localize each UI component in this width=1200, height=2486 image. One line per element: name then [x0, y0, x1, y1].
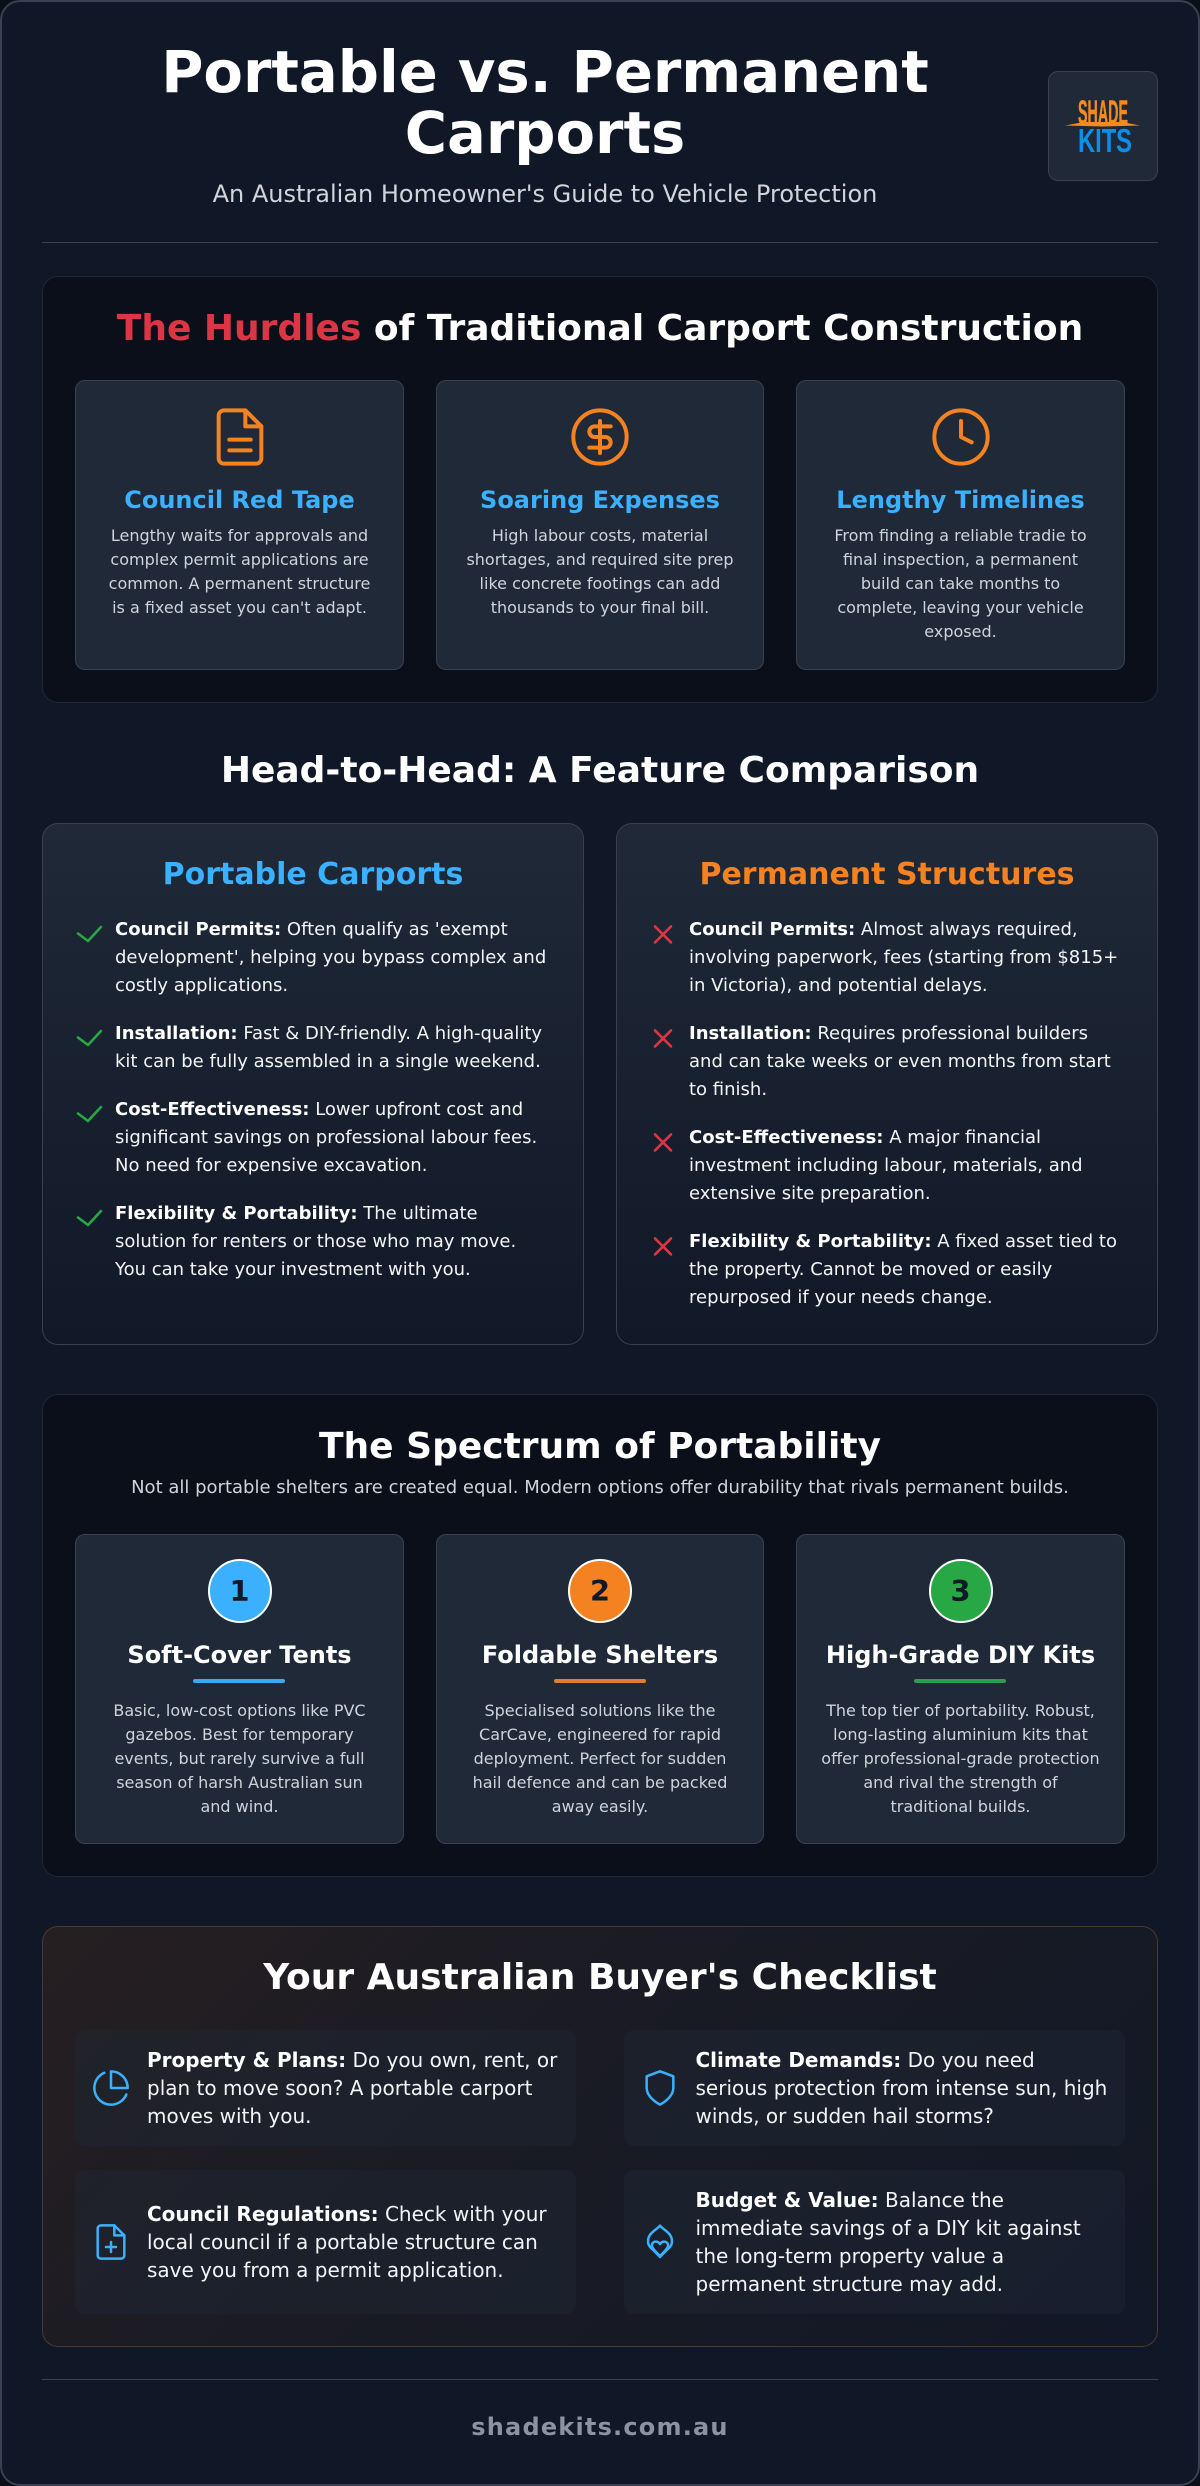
card text: exposed.	[924, 622, 997, 641]
heading: The Spectrum of Portability	[319, 1426, 881, 1466]
item: installation: and can take weeks or even months from start	[689, 1051, 1111, 1072]
card text: and rival the strength of	[863, 1773, 1058, 1792]
card text: CarCave, engineered for rapid	[479, 1725, 721, 1744]
item: flexibility	[76, 1203, 516, 1280]
card text: traditional builds.	[890, 1797, 1030, 1816]
step number 3: 3	[950, 1574, 971, 1608]
item: property and plans: Property & Plans: Do you own, rent, or	[147, 2048, 557, 2072]
icon: dollar	[571, 408, 629, 466]
heading: comparison: Head-to-Head: A Feature Comparison	[221, 750, 979, 791]
card text	[473, 1701, 727, 1816]
item: council regulations	[75, 2170, 576, 2314]
card text	[466, 526, 734, 617]
item: installation	[76, 1023, 542, 1072]
item: flexibility: You can take your investment with you.	[115, 1259, 471, 1280]
step number 1: 1	[229, 1574, 250, 1608]
title	[161, 39, 929, 166]
logo: Shade Kits	[1048, 71, 1158, 181]
card text: season of harsh Australian sun	[116, 1773, 363, 1792]
item: council permits	[654, 919, 1118, 996]
card text	[109, 526, 370, 617]
card heading: Council Red Tape	[124, 486, 355, 514]
item: property and plans: moves with you.	[147, 2104, 312, 2128]
card: lengthy timelines	[796, 380, 1125, 670]
card heading: High-Grade DIY Kits	[826, 1640, 1095, 1668]
step number 2	[568, 1559, 632, 1623]
item: climate demands: serious protection from intense sun, high	[696, 2076, 1107, 2100]
icon: shield	[645, 2070, 675, 2106]
icon: budget heart	[646, 2224, 674, 2258]
panel: buyer's checklist	[42, 1926, 1158, 2346]
card text: build can take months to	[861, 574, 1060, 593]
heading: hurdles: The Hurdles of Traditional Carport Construction	[117, 308, 1083, 348]
item: budget and value	[624, 2170, 1124, 2314]
card text: deployment. Perfect for sudden	[474, 1749, 726, 1768]
card text: final inspection, a permanent	[843, 550, 1078, 569]
item: council permits	[76, 919, 546, 996]
item: council permits: costly applications.	[115, 975, 288, 996]
card text: From finding a reliable tradie to	[834, 526, 1087, 545]
item: climate demands: winds, or sudden hail storms?	[696, 2104, 994, 2128]
item: budget and value: the long-term property value a	[696, 2244, 1004, 2268]
item: cost-effectiveness: investment including labour, materials, and	[689, 1155, 1083, 1176]
card text	[821, 1701, 1100, 1816]
title: Portable vs. Permanent	[161, 39, 929, 106]
card heading: Lengthy Timelines	[836, 486, 1085, 514]
item: cost-effectiveness: significant savings on professional labour fees.	[115, 1127, 537, 1148]
item: installation	[654, 1023, 1111, 1100]
heading: Your Australian Buyer's Checklist	[263, 1957, 937, 1998]
card text: Basic, low-cost options like PVC	[113, 1701, 366, 1720]
item: council regulations: local council if a portable structure can	[147, 2230, 538, 2254]
card text: offer professional-grade protection	[821, 1749, 1100, 1768]
card text	[834, 526, 1087, 641]
item: council regulations: save you from a permit application.	[147, 2258, 504, 2282]
item: cost-effectiveness	[76, 1099, 537, 1176]
card text: long-lasting aluminium kits that	[833, 1725, 1088, 1744]
intro text: Not all portable shelters are created equal. Modern options offer durability that rivals permanent builds.	[131, 1477, 1069, 1498]
card text: is a fixed asset you can't adapt.	[112, 598, 367, 617]
card: high-grade DIY kits	[796, 1534, 1125, 1844]
subtitle: An Australian Homeowner's Guide to Vehicle Protection	[213, 180, 877, 208]
item: flexibility: Flexibility & Portability: A fixed asset tied to	[689, 1231, 1117, 1252]
card: soft-cover tents	[75, 1534, 404, 1844]
item: installation: kit can be fully assembled in a single weekend.	[115, 1051, 541, 1072]
panel: permanent structures	[616, 823, 1158, 1345]
card: council red tape	[75, 380, 404, 670]
step number 2: 2	[590, 1574, 610, 1608]
icon: file plus	[96, 2224, 126, 2260]
card text: Specialised solutions like the	[484, 1701, 716, 1720]
card heading: Soft-Cover Tents	[127, 1640, 352, 1668]
title: Carports	[405, 100, 685, 166]
step number 1	[208, 1559, 272, 1623]
item: council permits: in Victoria), and potential delays.	[689, 975, 988, 996]
item: cost-effectiveness	[654, 1127, 1083, 1204]
panel heading: Portable Carports	[163, 856, 463, 892]
item: property and plans	[75, 2030, 576, 2146]
card heading: Foldable Shelters	[482, 1640, 718, 1668]
panel: hurdles	[42, 276, 1158, 703]
card: soaring expenses	[436, 380, 764, 670]
item: flexibility: solution for renters or those who may move.	[115, 1231, 516, 1252]
panel heading: Permanent Structures	[699, 856, 1075, 892]
item: installation: Installation: Fast & DIY-friendly. A high-quality	[115, 1023, 542, 1044]
item: flexibility: repurposed if your needs change.	[689, 1287, 993, 1308]
card text: gazebos. Best for temporary	[125, 1725, 354, 1744]
step number 3	[928, 1559, 992, 1623]
item: budget and value: permanent structure may add.	[696, 2272, 1003, 2296]
card text	[113, 1701, 366, 1816]
card text: and wind.	[200, 1797, 279, 1816]
card: foldable shelters	[436, 1534, 764, 1844]
card text: The top tier of portability. Robust,	[826, 1701, 1095, 1720]
card text: events, but rarely survive a full	[114, 1749, 365, 1768]
item: climate demands	[624, 2030, 1124, 2146]
item: council permits: involving paperwork, fees (starting from $815+	[689, 947, 1118, 968]
icon: document	[216, 408, 264, 466]
card text: complete, leaving your vehicle	[837, 598, 1084, 617]
item: property and plans: plan to move soon? A portable carport	[147, 2076, 532, 2100]
card text: like concrete footings can add	[480, 574, 720, 593]
item: installation: Installation: Requires professional builders	[689, 1023, 1088, 1044]
item: budget and value: Budget & Value: Balance the	[696, 2188, 1004, 2212]
card text: High labour costs, material	[492, 526, 708, 545]
logo: Shade Kits: KITS	[1078, 122, 1132, 159]
icon: pie chart	[93, 2070, 129, 2106]
item: budget and value: immediate savings of a DIY kit against	[696, 2216, 1081, 2240]
card text: hail defence and can be packed	[473, 1773, 727, 1792]
card text: complex permit applications are	[110, 550, 369, 569]
card text: Lengthy waits for approvals and	[111, 526, 368, 545]
card text: away easily.	[552, 1797, 648, 1816]
panel: spectrum of portability	[42, 1394, 1158, 1877]
item: council permits: development', helping you bypass complex and	[115, 947, 546, 968]
card heading: Soaring Expenses	[480, 486, 720, 514]
item: cost-effectiveness: Cost-Effectiveness: Lower upfront cost and	[115, 1099, 523, 1120]
item: council permits: Council Permits: Almost always required,	[689, 919, 1078, 940]
item: cost-effectiveness: extensive site preparation.	[689, 1183, 931, 1204]
footer: website: shadekits.com.au	[471, 2412, 729, 2440]
item: council regulations: Council Regulations: Check with your	[147, 2202, 547, 2226]
item: cost-effectiveness: No need for expensive excavation.	[115, 1155, 427, 1176]
card text: common. A permanent structure	[109, 574, 370, 593]
icon: clock	[932, 408, 990, 466]
item: flexibility: the property. Cannot be moved or easily	[689, 1259, 1052, 1280]
item: climate demands: Climate Demands: Do you need	[696, 2048, 1035, 2072]
item: flexibility	[654, 1231, 1117, 1308]
panel: portable carports	[42, 823, 584, 1345]
item: cost-effectiveness: Cost-Effectiveness: A major financial	[689, 1127, 1041, 1148]
item: council permits: Council Permits: Often qualify as 'exempt	[115, 919, 508, 940]
card text: shortages, and required site prep	[466, 550, 734, 569]
card text: thousands to your final bill.	[491, 598, 709, 617]
item: installation: to finish.	[689, 1079, 767, 1100]
item: flexibility: Flexibility & Portability: The ultimate	[115, 1203, 478, 1224]
